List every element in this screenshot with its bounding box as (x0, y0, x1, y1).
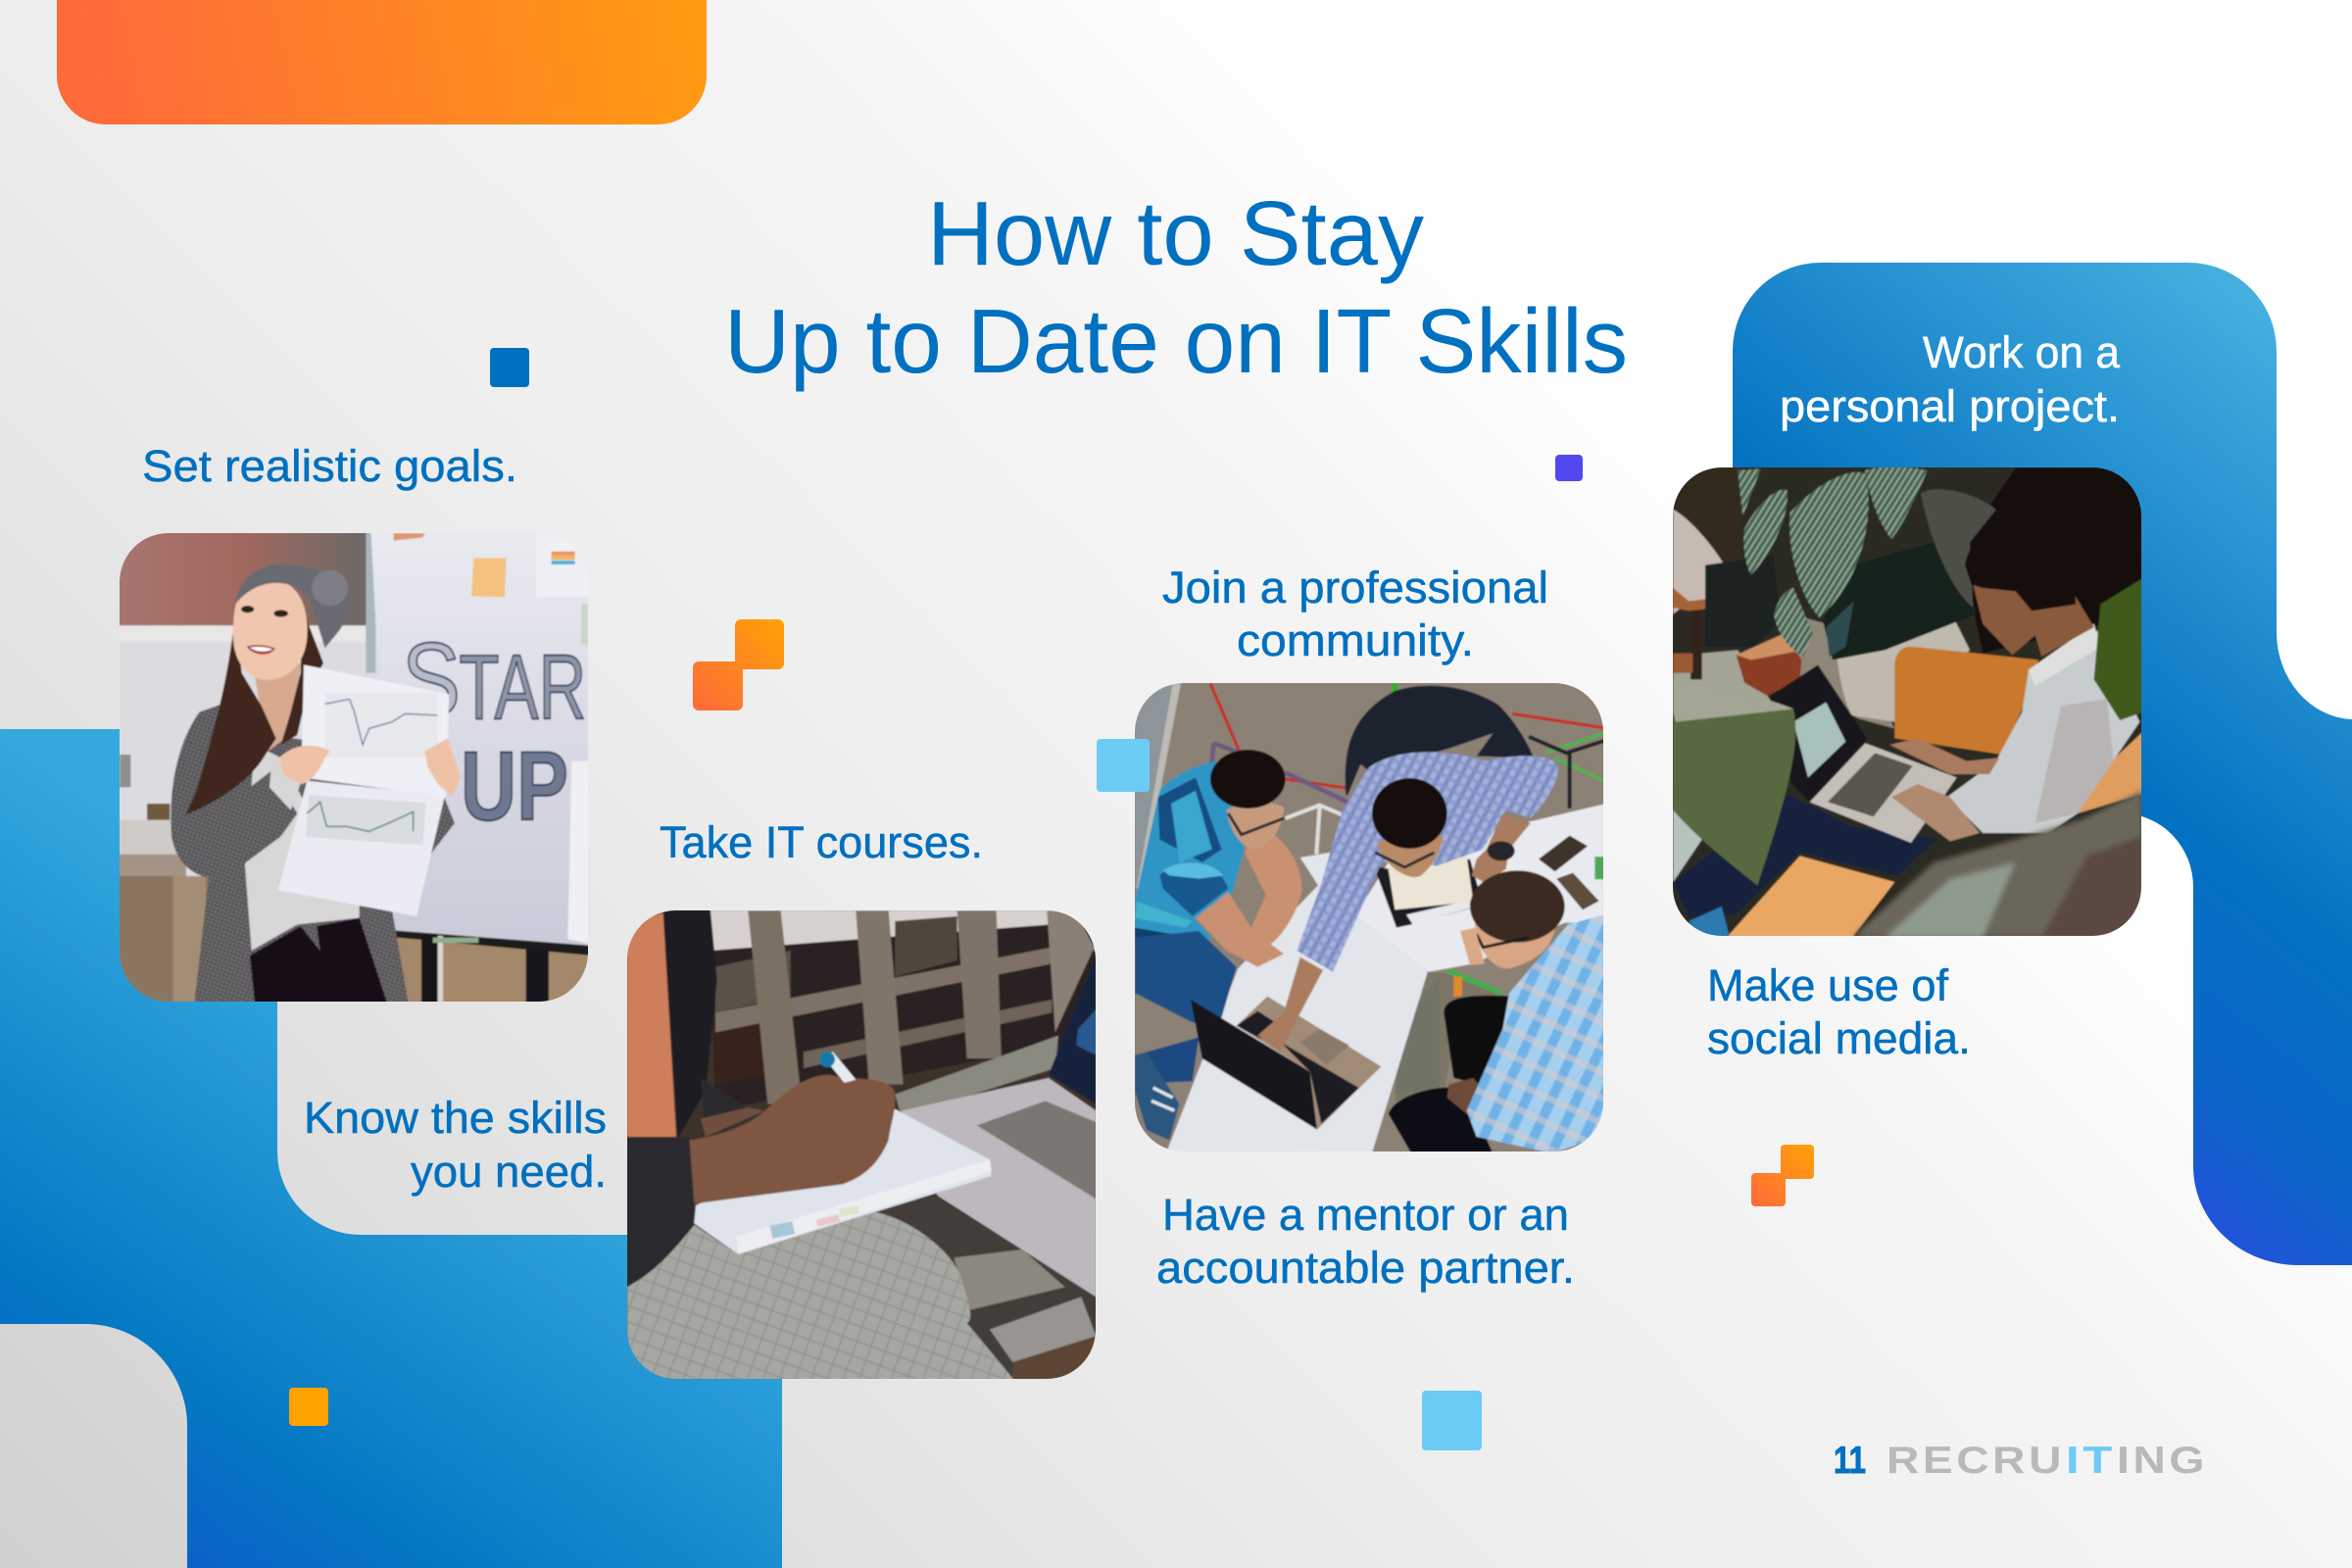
logo: 11 Recruiting: RECRU (1886, 1440, 2065, 1482)
right blue shape (1733, 263, 2352, 1265)
label: work on a personal project (1780, 327, 2121, 431)
left blue shape (0, 729, 782, 1568)
decorative square: blue (490, 348, 529, 387)
title: How to Stay (927, 182, 1425, 284)
label: set realistic goals: Set realistic goals. (142, 441, 517, 491)
logo: 11 Recruiting (1834, 1440, 2208, 1482)
label: have a mentor (1156, 1190, 1575, 1293)
decorative square: purple (1555, 455, 1583, 481)
label: know the skills (304, 1093, 607, 1197)
icon: orange connector lower (1751, 1145, 1814, 1206)
icon: orange connector upper (693, 619, 784, 710)
label: have a mentor: Have a mentor or an (1162, 1190, 1569, 1240)
label: work on a personal project: personal project. (1780, 381, 2120, 431)
decorative square: orange (289, 1388, 328, 1426)
label: work on a personal project: Work on a (1923, 327, 2121, 377)
label: take IT courses: Take IT courses. (660, 817, 983, 867)
title (724, 182, 1628, 392)
decorative square: light blue over photo (1097, 739, 1150, 792)
logo: 11 Recruiting: ING (2117, 1440, 2208, 1482)
orange top banner (57, 0, 707, 124)
label: make use of social media: Make use of (1707, 960, 1948, 1010)
photo: man with laptop on sofa among plants (1672, 466, 2144, 939)
label: make use of social media: social media. (1707, 1013, 1971, 1063)
photo: woman presenting at whiteboard: UP (461, 732, 568, 842)
photo: woman presenting at whiteboard: S (402, 620, 461, 738)
photo: woman presenting at whiteboard: TAR (459, 636, 586, 738)
decorative square: light blue bottom (1422, 1391, 1482, 1450)
label: join a professional community: community. (1237, 615, 1474, 665)
label: know the skills: you need. (411, 1147, 607, 1197)
label: make use of social media (1707, 960, 1971, 1063)
title: Up to Date on IT Skills (724, 290, 1628, 392)
label: join a professional community (1162, 563, 1548, 665)
logo: 11 Recruiting: IT (2066, 1440, 2116, 1482)
photo: hand writing in notebook (625, 908, 1098, 1380)
label: know the skills: Know the skills (304, 1093, 607, 1143)
label: have a mentor: accountable partner. (1156, 1243, 1575, 1293)
logo: 11 Recruiting: 11 (1834, 1440, 1866, 1482)
photo: three colleagues around a laptop (1134, 682, 1605, 1154)
photo: woman presenting at whiteboard (118, 529, 591, 1004)
label: join a professional community: Join a professional (1162, 563, 1548, 612)
